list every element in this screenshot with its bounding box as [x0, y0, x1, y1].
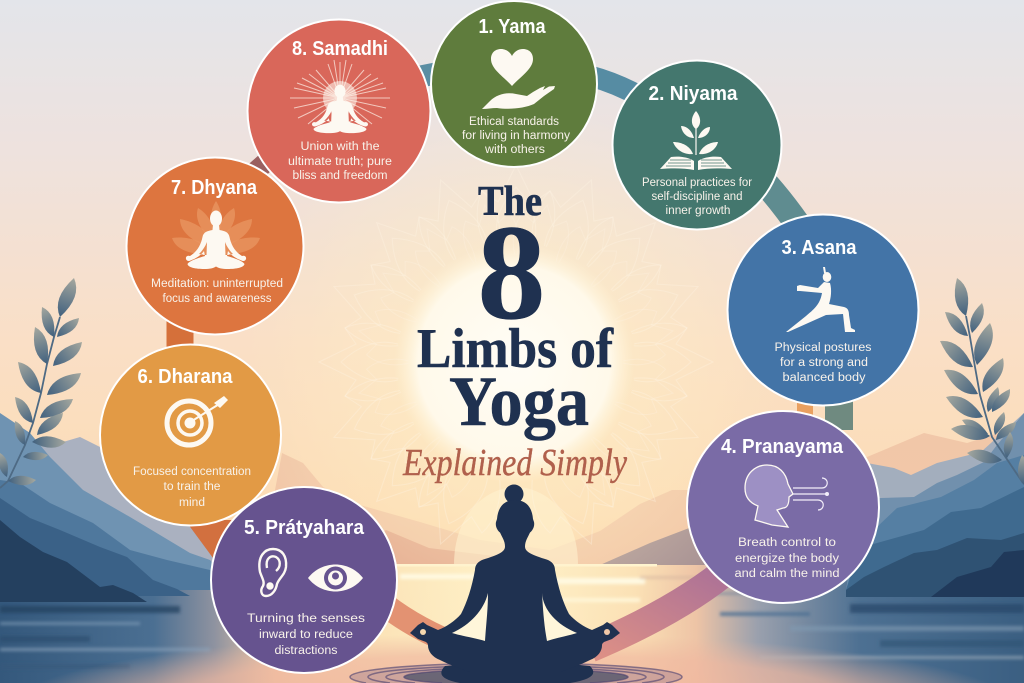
side mountains: [0, 413, 1024, 602]
icon: eye: [308, 564, 363, 592]
description: for living in harmony: [462, 130, 570, 142]
description: and calm the mind: [734, 568, 840, 580]
title: Yoga: [449, 363, 589, 441]
icon: meditator on lotus: [172, 201, 260, 269]
heading: Dhyana: 7. Dhyana: [171, 177, 258, 199]
description: for a strong and: [780, 357, 868, 369]
distant peach mountains: [260, 425, 1024, 570]
description: Breath control to: [738, 537, 836, 549]
ripples under the meditator: [350, 663, 682, 683]
description: bliss and freedom: [292, 170, 388, 182]
description: [247, 613, 365, 657]
description: balanced body: [782, 372, 866, 384]
heading: Dharana: 6. Dharana: [138, 366, 233, 388]
ring connecting the limbs: [180, 73, 839, 650]
icon: heart in hand: [482, 49, 555, 109]
description: energize the body: [735, 553, 839, 565]
panel: 4. Pranayama: [687, 411, 879, 603]
heading: Asana: 3. Asana: [782, 237, 857, 259]
description: to train the: [164, 481, 220, 493]
meditating silhouette: [410, 484, 620, 683]
description: [642, 177, 752, 217]
icon: target with arrow: [167, 396, 228, 445]
icon: plant growing from book: [660, 111, 732, 170]
description: Turning the senses: [247, 613, 365, 625]
heading: Niyama: 2. Niyama: [648, 83, 738, 105]
description: distractions: [274, 645, 338, 657]
description: [774, 342, 872, 384]
icon: warrior pose: [786, 267, 855, 332]
title: The: [478, 179, 542, 225]
heading: Yama: 1. Yama: [478, 16, 546, 38]
right laurel branch: [936, 276, 1024, 485]
description: Union with the: [300, 141, 380, 153]
heading: Samadhi: 8. Samadhi: [292, 38, 388, 60]
description: Meditation: uninterrupted: [151, 278, 283, 290]
description: Personal practices for: [642, 177, 752, 189]
description: inward to reduce: [259, 629, 353, 641]
title: 8: [478, 198, 546, 348]
description: [151, 278, 283, 305]
water: [0, 564, 1024, 683]
description: self-discipline and: [652, 191, 742, 203]
panel: 8. Samadhi: [248, 20, 430, 202]
description: Focused concentration: [133, 466, 251, 478]
panel: 2. Niyama: [612, 60, 782, 230]
heading: Pranayama: 4. Pranayama: [721, 436, 844, 458]
title: Limbs of: [417, 318, 614, 380]
panel: 3. Asana: [728, 214, 918, 406]
description: [462, 116, 570, 156]
icon: radiant meditator: [290, 60, 390, 133]
description: inner growth: [666, 205, 730, 217]
description: [288, 141, 392, 182]
description: with others: [484, 144, 545, 156]
mandala outline: [319, 165, 713, 559]
left laurel branch: [0, 276, 86, 488]
panel: 6. Dharana: [100, 344, 281, 526]
description: Physical postures: [774, 342, 872, 354]
icon: head breathing: [745, 465, 829, 527]
panel: 5. Pratyahara: [211, 487, 397, 673]
heading: Pratyahara: 5. Prátyahara: [244, 517, 365, 539]
description: Ethical standards: [469, 116, 559, 128]
subtitle: Explained Simply: [402, 442, 627, 484]
description: [734, 537, 840, 580]
description: [133, 466, 251, 509]
icon: ear: [259, 549, 286, 596]
description: ultimate truth; pure: [288, 156, 392, 168]
description: focus and awareness: [162, 293, 272, 305]
title: [417, 179, 614, 441]
panel: 7. Dhyana: [126, 158, 304, 334]
panel: 1. Yama: [431, 1, 597, 167]
sun glow: [245, 102, 785, 642]
description: mind: [179, 497, 205, 509]
